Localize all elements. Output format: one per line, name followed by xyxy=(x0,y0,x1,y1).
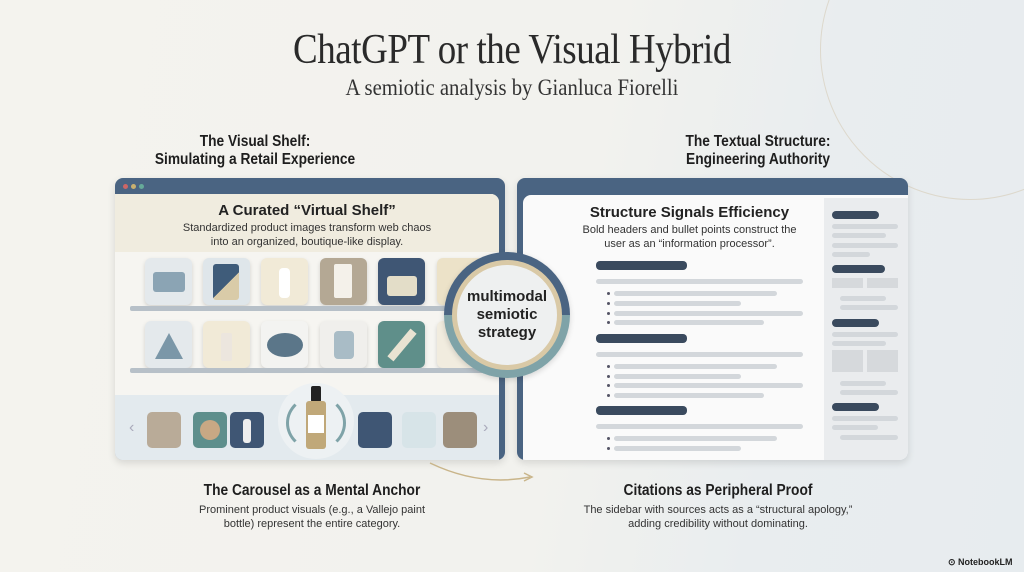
text block: carousel anchor xyxy=(199,482,425,530)
document lines xyxy=(596,261,687,270)
heading: visual shelf xyxy=(155,133,355,168)
curated shelf header: into an organized, boutique-like display. xyxy=(211,236,403,248)
decorative background circle xyxy=(820,0,1024,200)
panel: visual shelf browser xyxy=(115,178,505,460)
curated shelf header: A Curated “Virtual Shelf” xyxy=(218,202,396,219)
heading: visual shelf: Simulating a Retail Experience xyxy=(155,151,355,168)
subtitle: A semiotic analysis by Gianluca Fiorelli xyxy=(346,75,678,100)
center circle: multimodal semiotic strategy: multimodal xyxy=(467,288,547,305)
arrow: connecting curve xyxy=(430,462,534,482)
text block: citations xyxy=(584,482,852,530)
panel: textual structure browser: user as an “information processor”. xyxy=(604,238,775,250)
text block: citations: The sidebar with sources acts as a “structural apology,” xyxy=(584,504,852,516)
center circle: multimodal semiotic strategy: strategy xyxy=(478,324,536,341)
carousel strip: › xyxy=(483,419,488,436)
sidebar xyxy=(824,198,908,460)
carousel strip xyxy=(115,395,499,460)
center circle: multimodal semiotic strategy: semiotic xyxy=(477,306,537,323)
center circle: multimodal semiotic strategy xyxy=(444,252,570,378)
text block: carousel anchor: bottle) represent the entire category. xyxy=(224,518,400,530)
logo: NotebookLM: ⊙ NotebookLM xyxy=(948,557,1013,567)
text block: citations: adding credibility without dominating. xyxy=(628,518,808,530)
title: ChatGPT or the Visual Hybrid xyxy=(293,27,731,73)
shelf row 2 icons xyxy=(145,321,192,368)
carousel anchor circle with bottle xyxy=(278,383,354,459)
shelf row 1 icons xyxy=(145,258,192,305)
heading: textual structure: Engineering Authority xyxy=(686,151,830,168)
text block: carousel anchor: The Carousel as a Mental Anchor xyxy=(204,482,420,499)
curated shelf header xyxy=(115,194,499,252)
text block: carousel anchor: Prominent product visuals (e.g., a Vallejo paint xyxy=(199,504,425,516)
structure heading text: Structure Signals Efficiency xyxy=(590,204,789,221)
panel: textual structure browser xyxy=(517,178,908,460)
shelf 1 xyxy=(130,306,490,311)
panel: textual structure browser: Bold headers and bullet points construct the xyxy=(582,224,797,236)
heading: textual structure xyxy=(685,133,831,168)
carousel strip: ‹ xyxy=(129,419,134,436)
heading: visual shelf: The Visual Shelf: xyxy=(200,133,310,150)
shelf 2 xyxy=(130,368,490,373)
curated shelf header: Standardized product images transform web chaos xyxy=(183,222,431,234)
text block: citations: Citations as Peripheral Proof xyxy=(624,482,812,499)
heading: textual structure: The Textual Structure: xyxy=(685,133,831,150)
browser dots xyxy=(123,184,144,189)
